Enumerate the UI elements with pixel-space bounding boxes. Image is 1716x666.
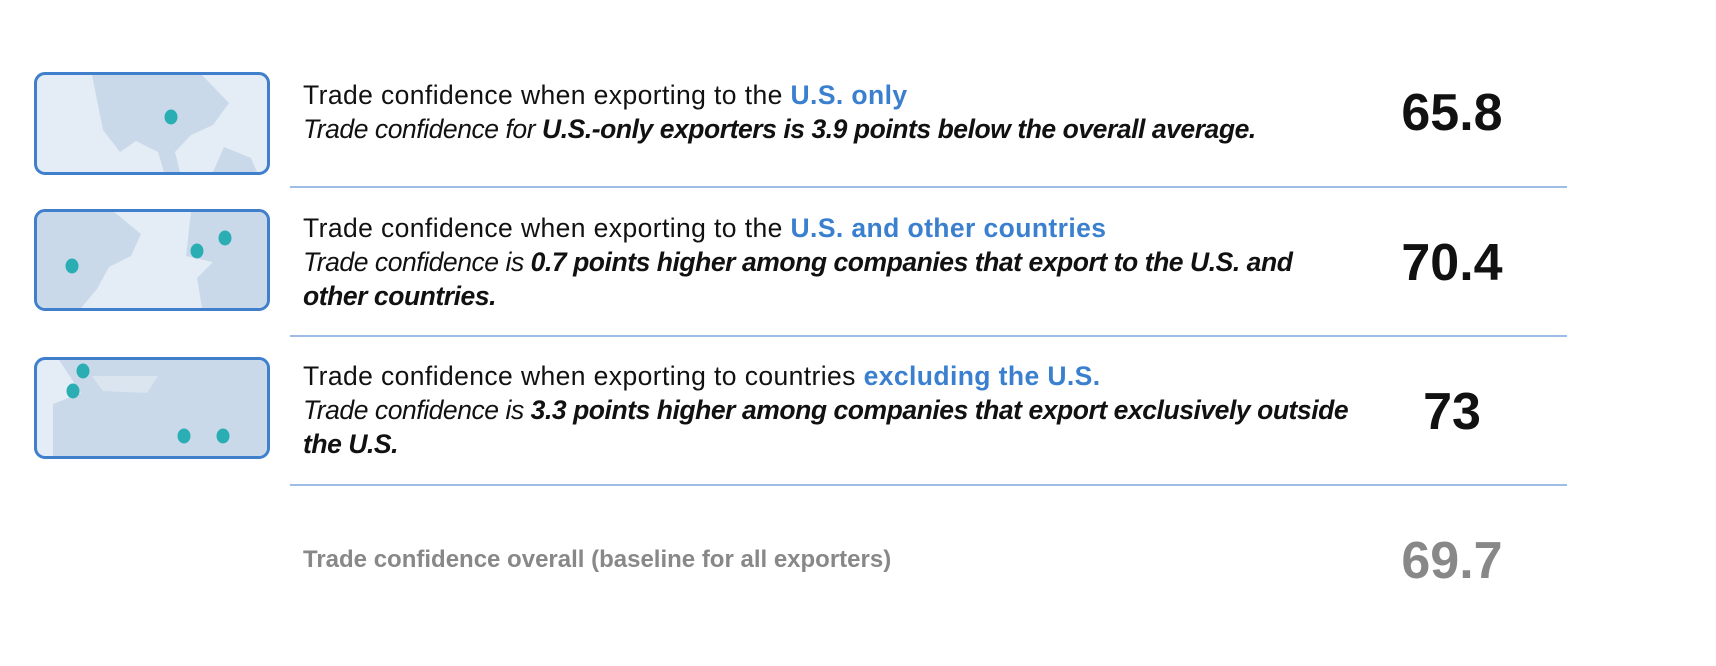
text block: US and other countries	[303, 213, 1294, 311]
map icon: US only	[34, 72, 270, 175]
text block: excluding US: Trade confidence is 3.3 points higher among companies that export exclusively outside	[303, 395, 1348, 425]
text block: US only: Trade confidence for U.S.-only exporters is 3.9 points below the overall average.	[303, 114, 1256, 144]
number: 73: 73	[1423, 383, 1481, 441]
text block: US and other countries: other countries.	[303, 281, 496, 311]
baseline text: Trade confidence overall (baseline for all exporters)	[303, 546, 891, 573]
number: 70.4: 70.4	[1401, 234, 1503, 292]
text block: excluding US: Trade confidence when exporting to countries excluding the U.S.	[303, 361, 1100, 391]
number: 69.7: 69.7	[1401, 532, 1503, 590]
text block: US and other countries: Trade confidence when exporting to the U.S. and other countries	[303, 213, 1106, 243]
text block: US and other countries: Trade confidence is 0.7 points higher among companies that export to the U.S. and	[303, 247, 1292, 277]
text block: excluding US	[303, 361, 1348, 459]
number: 65.8: 65.8	[1401, 84, 1503, 142]
map icon: US and other countries	[34, 209, 270, 311]
map icon: excluding US	[34, 357, 270, 459]
text block: excluding US: the U.S.	[303, 429, 398, 459]
text block: US only	[303, 80, 1256, 144]
text block: US only: Trade confidence when exporting to the U.S. only	[303, 80, 908, 110]
